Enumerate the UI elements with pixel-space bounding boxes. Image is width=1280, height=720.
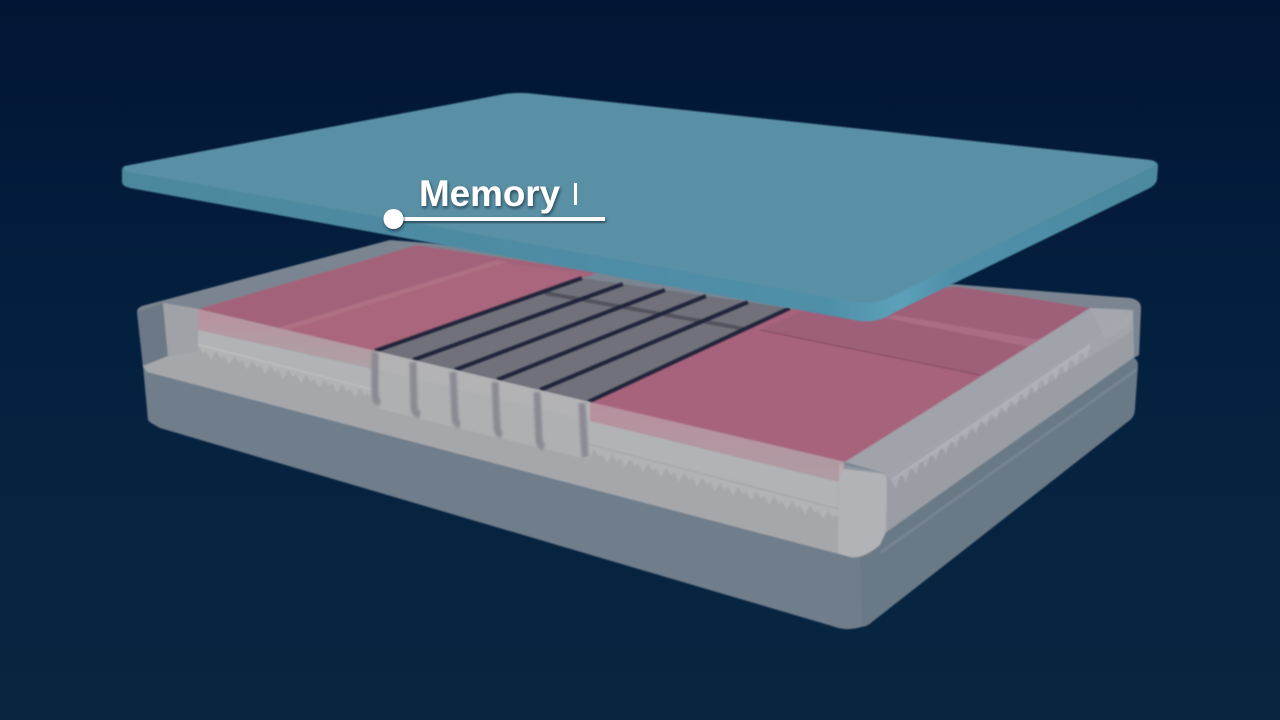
mattress shell <box>137 240 1141 535</box>
grey zoned slats <box>375 278 790 402</box>
foam corner block <box>838 464 887 558</box>
saw-tooth edge: right side <box>892 335 1090 496</box>
label: Memory <box>384 173 605 229</box>
base front face <box>143 358 872 629</box>
foam corner upper block <box>1090 308 1133 340</box>
foam right face <box>885 310 1134 533</box>
foam light band slats <box>376 369 590 460</box>
base right side <box>860 356 1138 627</box>
foam slat cut-outs <box>375 352 585 457</box>
leader line <box>393 217 605 221</box>
red foam zone: left front block <box>278 262 590 351</box>
bottom base layer <box>143 356 1138 629</box>
foam rim band right (pink) <box>590 402 845 482</box>
foam rim band left (pink) <box>198 309 376 369</box>
memory foam top layer <box>122 93 1158 321</box>
label cursor <box>574 183 577 205</box>
saw-tooth edge: right front <box>590 444 838 526</box>
label text: Memory <box>419 173 561 214</box>
topper body <box>122 93 1158 321</box>
foam right light band <box>887 310 1133 482</box>
leader dot <box>384 209 404 229</box>
middle mattress layer <box>137 240 1141 558</box>
red right seam <box>885 315 1040 347</box>
red right thin seam <box>760 330 980 375</box>
foam front face <box>143 303 887 558</box>
base top seam <box>880 370 1136 553</box>
slat grooves <box>375 278 790 402</box>
foam light band left <box>198 330 372 390</box>
foam right rim <box>845 308 1133 474</box>
red foam zone: left <box>198 245 600 351</box>
slat surface <box>375 278 790 402</box>
red foam zone: right <box>590 287 1090 462</box>
red right back block <box>760 287 1090 375</box>
red left seam light <box>278 260 506 330</box>
saw-tooth edge: left front <box>198 343 372 406</box>
foam light band right <box>590 421 838 508</box>
foam rim band slats <box>376 351 590 421</box>
topper top face <box>124 93 1155 303</box>
foam left corner <box>163 303 198 356</box>
slat cross seam <box>545 293 745 329</box>
left shell corner shade <box>137 303 168 366</box>
